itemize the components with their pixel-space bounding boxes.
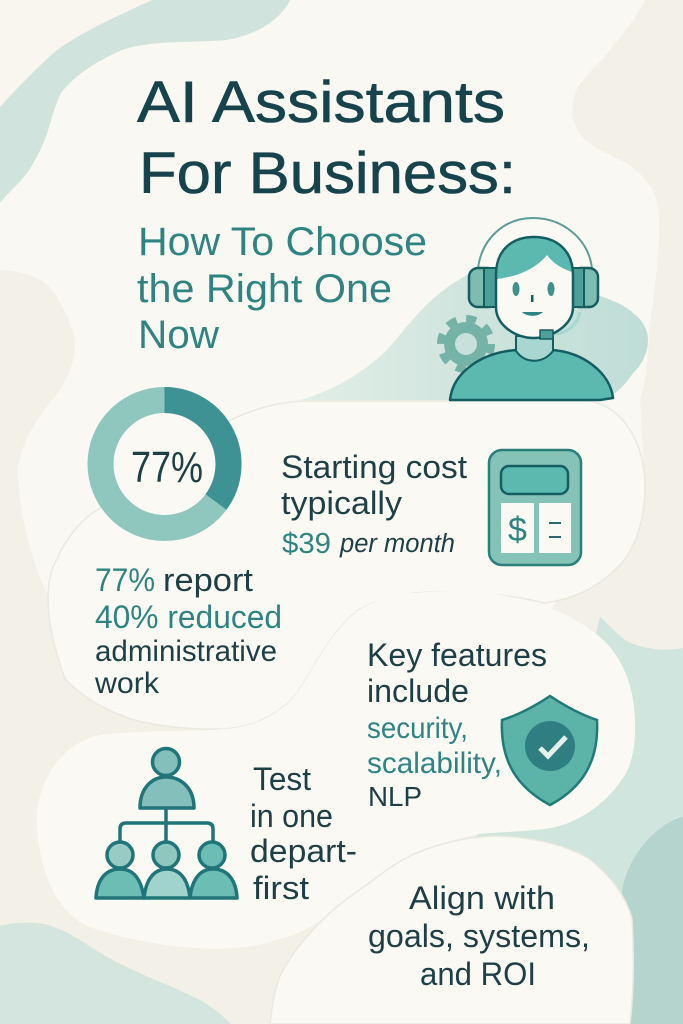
text block: align with goals: goals, systems, xyxy=(368,918,590,954)
cream panel: features xyxy=(37,591,635,949)
cream panel: header xyxy=(0,0,659,610)
donut chart: 77%: 77% xyxy=(131,443,203,492)
text block: reduced admin work: 77% xyxy=(95,562,155,598)
donut chart: 77% xyxy=(100,400,229,528)
subtitle: How To Choose xyxy=(138,220,427,264)
text block: test in one department: in one xyxy=(250,798,333,834)
text block: starting cost xyxy=(281,449,467,560)
text block: align with goals: and ROI xyxy=(420,956,536,992)
title: For Business: xyxy=(139,141,516,206)
text block: key features: include xyxy=(367,673,469,709)
text block: starting cost: Starting cost xyxy=(281,449,467,485)
subtitle: Now xyxy=(138,313,219,357)
text block: test in one department: first xyxy=(253,870,309,906)
cream panel: align xyxy=(270,836,633,1024)
text block: test in one department: Test xyxy=(253,761,311,797)
text block: key features: scalability, xyxy=(367,747,502,780)
text block: key features: NLP xyxy=(368,781,422,812)
title xyxy=(137,70,516,206)
text block: starting cost: typically xyxy=(281,485,402,521)
subtitle: the Right One xyxy=(137,267,392,311)
text block: key features: security, xyxy=(367,712,468,745)
text block: key features: Key features xyxy=(367,637,547,673)
text block: reduced admin work: 40% reduced xyxy=(95,599,282,635)
text block: align with goals: Align with xyxy=(409,880,555,916)
icon: assistant with headset xyxy=(450,218,613,400)
text block: starting cost: per month xyxy=(339,530,455,558)
icon: shield with check xyxy=(502,696,597,805)
icon: calculator: $ xyxy=(508,511,527,549)
title: AI Assistants xyxy=(137,70,505,135)
icon: calculator xyxy=(489,450,581,565)
teal band: top left xyxy=(0,0,290,203)
teal blob behind assistant xyxy=(300,272,648,400)
icon: gear xyxy=(441,319,491,369)
text block: starting cost: $39 xyxy=(282,528,331,560)
text block: test in one department xyxy=(250,761,357,906)
text block: align with goals xyxy=(368,880,590,992)
text block: test in one department: depart- xyxy=(250,833,357,869)
text block: reduced admin work xyxy=(94,562,282,700)
text block: key features xyxy=(367,637,547,812)
subtitle xyxy=(137,220,427,357)
cream panel: stats xyxy=(48,401,645,729)
text block: reduced admin work: report xyxy=(163,562,253,598)
icon: org chart xyxy=(96,748,237,898)
text block: reduced admin work: work xyxy=(94,667,160,700)
text block: reduced admin work: administrative xyxy=(95,635,277,668)
